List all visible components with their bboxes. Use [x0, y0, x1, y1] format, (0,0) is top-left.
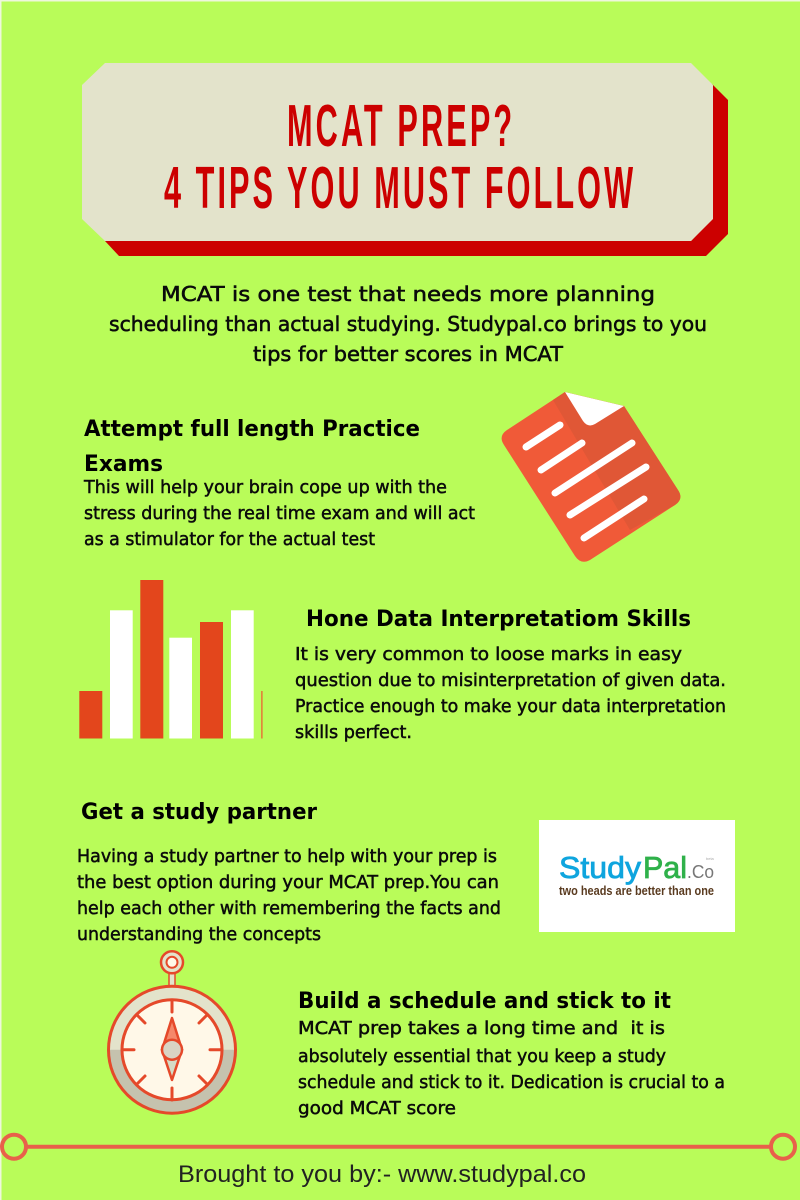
- tip 1 heading: Attempt full length Practice: [84, 417, 420, 442]
- title banner: [82, 63, 728, 256]
- tip 1 heading: Exams: [84, 452, 163, 477]
- banner shadow: [105, 84, 728, 256]
- tip 2 body: [295, 644, 726, 743]
- tip 1 body: stress during the real time exam and will act: [84, 503, 475, 524]
- tip 3 body: the best option during your MCAT prep.You can: [77, 872, 499, 893]
- tip 1 body: This will help your brain cope up with the: [83, 477, 447, 498]
- icon: document: [502, 392, 680, 562]
- banner plate: [82, 63, 713, 241]
- tip 3 body: help each other with remembering the facts and: [77, 898, 501, 919]
- tip 4 body: schedule and stick to it. Dedication is crucial to a: [298, 1072, 725, 1093]
- footer divider: [2, 1135, 795, 1159]
- tip 4 heading: Build a schedule and stick to it: [298, 989, 671, 1014]
- tip 1 body: as a stimulator for the actual test: [84, 529, 375, 550]
- tip 1 body: [83, 477, 475, 550]
- StudyPal logo: two heads are better than one: [559, 884, 714, 898]
- StudyPal logo: Study: [559, 850, 642, 885]
- tip 3 body: [77, 846, 501, 945]
- tip 3 heading: Get a study partner: [81, 800, 317, 825]
- tip 2 body: It is very common to loose marks in easy: [295, 644, 682, 665]
- intro text: MCAT is one test that needs more planning: [161, 282, 655, 306]
- tip 1 heading: [84, 417, 420, 477]
- tip 3 body: understanding the concepts: [77, 924, 321, 945]
- tip 2 heading: Hone Data Interpretatiom Skills: [306, 607, 691, 632]
- tip 3 body: Having a study partner to help with your prep is: [77, 846, 497, 867]
- tip 4 body: MCAT prep takes a long time and it is: [298, 1018, 665, 1039]
- tip 2 body: skills perfect.: [295, 722, 412, 743]
- StudyPal logo: [539, 820, 735, 932]
- intro text: [109, 282, 707, 366]
- footer credit: Brought to you by:- www.studypal.co: [178, 1161, 586, 1188]
- tip 4 body: good MCAT score: [298, 1098, 456, 1119]
- StudyPal logo: .Co: [687, 862, 714, 882]
- icon: compass: [108, 951, 236, 1113]
- StudyPal logo: beta: [706, 856, 715, 861]
- tip 4 body: absolutely essential that you keep a study: [298, 1046, 666, 1067]
- title line 2: 4 TIPS YOU MUST FOLLOW: [164, 154, 633, 221]
- title line 1: MCAT PREP?: [287, 92, 512, 159]
- StudyPal logo: Pal: [643, 850, 687, 885]
- icon: bar chart: [79, 580, 263, 738]
- tip 4 body: [298, 1018, 725, 1119]
- tip 2 body: question due to misinterpretation of given data.: [295, 670, 726, 691]
- intro text: tips for better scores in MCAT: [253, 342, 564, 366]
- tip 2 body: Practice enough to make your data interpretation: [295, 696, 726, 717]
- intro text: scheduling than actual studying. Studypal.co brings to you: [109, 312, 707, 336]
